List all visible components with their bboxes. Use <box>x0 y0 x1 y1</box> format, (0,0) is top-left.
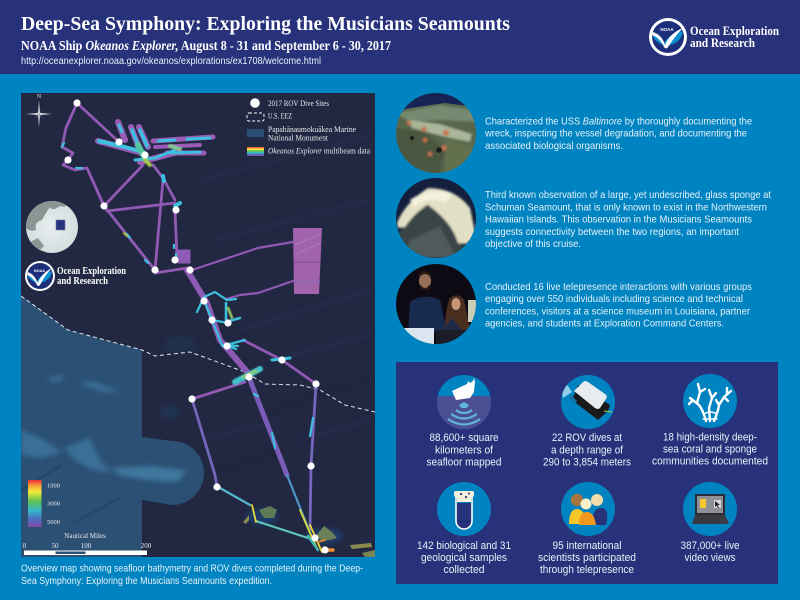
stat text: ROV <box>543 432 631 468</box>
stat: scientists people <box>561 482 615 536</box>
Papahanaumokuakea monument area <box>21 295 204 557</box>
depth colour scale: 3000 <box>47 500 60 508</box>
photo: telepresence team <box>396 264 476 344</box>
stat text: coral <box>652 432 768 468</box>
logo text: Ocean Exploration <box>690 24 779 38</box>
bathymetry texture <box>161 338 194 418</box>
compass rose <box>26 94 52 127</box>
header banner <box>0 0 800 74</box>
scale bar: 200 <box>141 542 152 550</box>
map caption: Overview map showing seafloor bathymetry and ROV dives completed during the Deep- <box>21 564 363 574</box>
stat text: samples: 142 biological and 31 <box>417 540 511 552</box>
stat text: scientists: through telepresence <box>540 564 634 576</box>
NOAA logo: NOAA <box>660 27 674 32</box>
url: http://oceanexplorer.noaa.gov/okeanos/explorations/ex1708/welcome.html <box>21 56 321 67</box>
photo: glass sponge <box>396 178 476 258</box>
US EEZ boundary <box>21 296 375 412</box>
text: telepresence: conferences, visitors at a science museum in Louisiana, partner <box>485 305 750 317</box>
tracks: main thick corridor <box>187 270 313 540</box>
stat: seafloor mapped <box>437 375 491 429</box>
stat: ROV dives <box>561 375 615 429</box>
stat text: video <box>680 540 740 564</box>
map legend: U.S. EEZ <box>268 112 292 120</box>
stats panel <box>396 362 778 584</box>
stat: samples test tube <box>437 482 491 536</box>
ROV dive sites <box>64 99 329 554</box>
map legend: National Monument <box>268 134 329 142</box>
stat: coral communities <box>683 374 737 428</box>
stat text: coral: communities documented <box>652 456 768 468</box>
title: Deep-Sea Symphony: Exploring the Musicians Seamounts <box>21 13 510 35</box>
stat text: samples <box>417 540 511 576</box>
text: telepresence: Conducted 16 live telepresence interactions with various groups <box>485 281 752 293</box>
multibeam survey tracks <box>62 103 333 552</box>
map caption <box>21 564 363 587</box>
locator globe <box>26 201 78 255</box>
map legend: 2017 ROV Dive Sites <box>268 99 329 108</box>
map NOAA logo: NOAA <box>34 269 45 273</box>
stat text: ROV: a depth range of <box>551 444 624 456</box>
logo text: and Research <box>690 36 755 50</box>
map legend <box>247 98 370 156</box>
stat text: coral: sea coral and sponge <box>663 444 757 456</box>
survey box east <box>293 228 322 294</box>
scale bar: 100 <box>81 542 92 550</box>
stat text: coral: 18 high-density deep- <box>663 432 757 444</box>
text: telepresence: engaging over 550 individuals including science and technical <box>485 293 743 305</box>
map logo text: Ocean Exploration <box>57 266 126 277</box>
text: telepresence <box>485 281 752 330</box>
Hawaiian islands <box>243 506 375 557</box>
text: telepresence: agencies, and students at Exploration Command Centers. <box>485 318 724 330</box>
stat text: video: 387,000+ live <box>680 540 740 552</box>
stat text: scientists: scientists participated <box>538 552 636 564</box>
text: glass sponge <box>485 189 771 250</box>
scale bar: 0 <box>23 542 27 550</box>
subtitle: NOAA Ship Okeanos Explorer, August 8 - 31 and September 6 - 30, 2017 <box>21 38 391 53</box>
stat text: seafloor: kilometers of <box>435 444 494 456</box>
text: glass sponge: objective of this cruise. <box>485 238 581 250</box>
stat text: ROV: 290 to 3,854 meters <box>543 456 631 468</box>
text: glass sponge: suggests connectivity between the two regions, an important <box>485 226 739 238</box>
stat text: ROV: 22 ROV dives at <box>552 432 622 444</box>
logo text <box>690 24 779 50</box>
depth colour scale: 5000 <box>47 519 60 526</box>
map NOAA logo <box>25 261 55 291</box>
text: Baltimore: Characterized the USS Baltimore by thoroughly documenting the <box>485 115 752 127</box>
tracks: top cluster base <box>98 122 213 162</box>
text: glass sponge: Schuman Seamount, that is only known to exist in the Northwestern <box>485 201 767 213</box>
map legend: Papahānaumokuākea Marine <box>268 125 356 134</box>
tracks: cyan high-resolution <box>62 125 313 538</box>
text: glass sponge: Third known observation of a large, yet undescribed, glass sponge at <box>485 189 771 201</box>
scale bar: Nautical Miles <box>64 532 106 540</box>
stat text: samples: geological samples <box>421 552 507 564</box>
text: Baltimore <box>484 115 752 152</box>
text: Baltimore: wreck, inspecting the vessel degradation, and documenting the <box>484 128 747 140</box>
scale bar: 50 <box>52 542 59 550</box>
stat text: seafloor <box>426 432 502 468</box>
depth colour scale <box>28 480 60 527</box>
map logo text: and Research <box>57 276 108 287</box>
tracks: purple transits <box>62 103 316 530</box>
map legend: Okeanos Explorer multibeam data <box>268 146 370 156</box>
purple survey square near centre <box>178 250 190 263</box>
stat text: seafloor: 88,600+ square <box>430 432 498 444</box>
compass rose: N <box>37 94 42 100</box>
photo: USS Baltimore wreck <box>396 93 476 173</box>
map panel <box>21 93 375 557</box>
text: Baltimore: associated biological organisms. <box>485 140 623 152</box>
NOAA logo <box>649 18 687 56</box>
stat: video laptop <box>683 482 737 536</box>
map caption: Sea Symphony: Exploring the Musicians Seamounts expedition. <box>21 576 272 587</box>
map logo text <box>57 266 126 284</box>
stat text: video: video views <box>684 552 736 564</box>
stat text: scientists <box>538 540 636 576</box>
depth colour scale: 1000 <box>47 482 60 490</box>
scale bar <box>23 532 152 555</box>
stat text: scientists: 95 international <box>552 540 622 552</box>
stat text: seafloor: seafloor mapped <box>426 456 502 468</box>
stat text: samples: collected <box>444 564 484 576</box>
text: glass sponge: Hawaiian Islands. This observation in the Musicians Seamounts <box>485 214 752 226</box>
tracks: Hawaii-bound yellow and green segments <box>252 505 333 552</box>
tracks: green/yellow hotspots <box>124 145 260 382</box>
